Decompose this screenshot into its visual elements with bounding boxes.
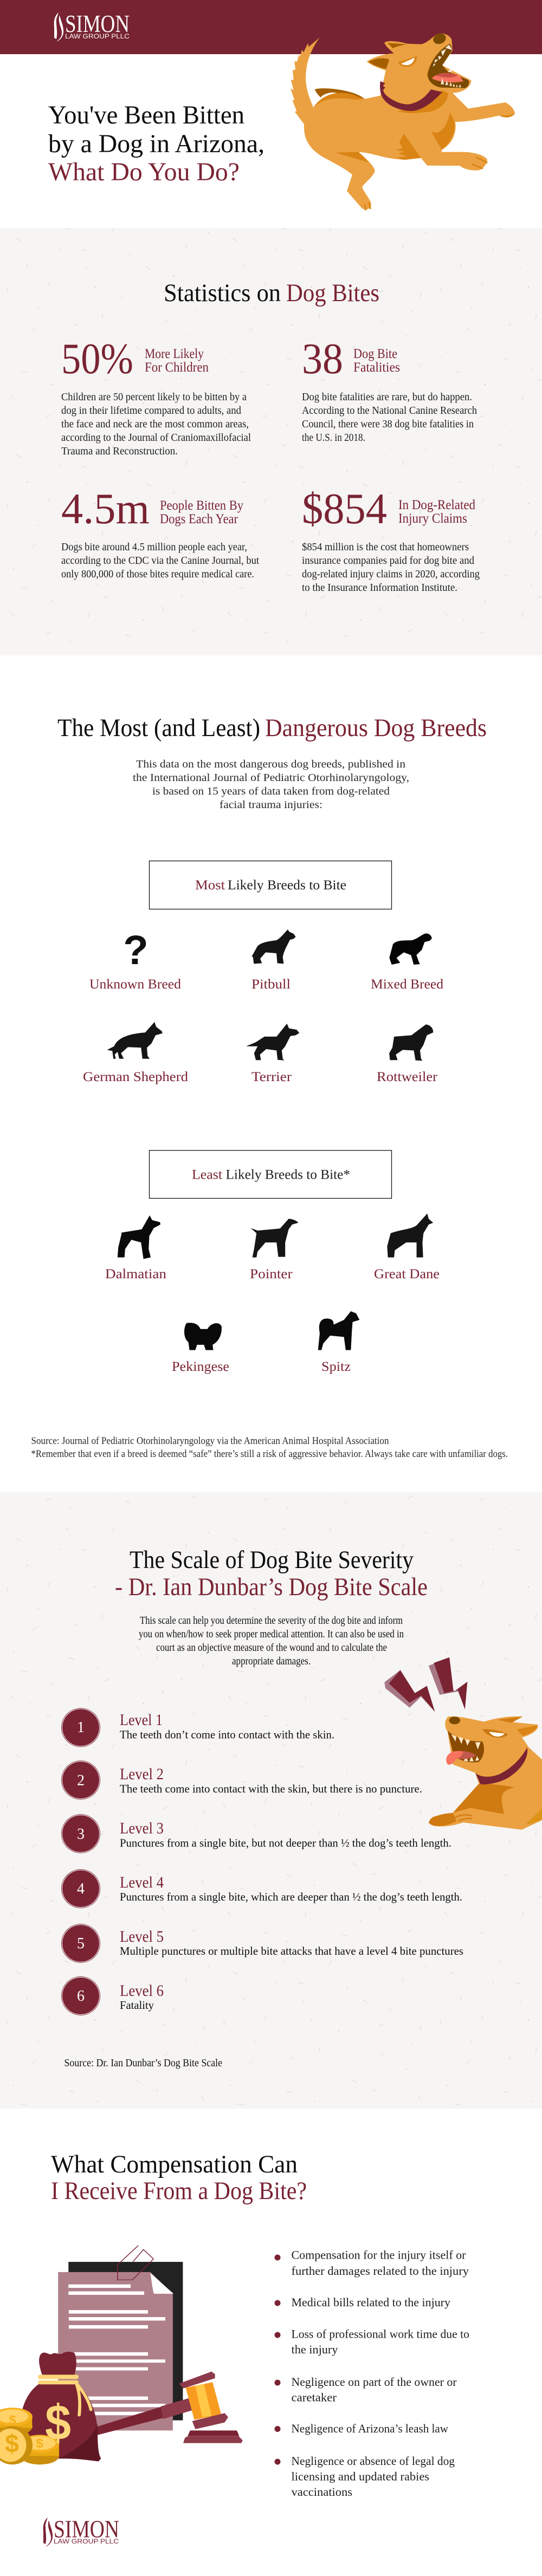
- heading: compensation: What Compensation Can: [51, 2150, 298, 2178]
- bullet item: licensing and vaccinations: [274, 2454, 455, 2499]
- bullet item: negligence of owner: caretaker: [292, 2391, 337, 2404]
- bullet item: compensation for injury: further damages related to the injury: [292, 2264, 469, 2278]
- level 4: 4: [77, 1881, 85, 1897]
- logo: Simon Law Group PLLC: LAW GROUP PLLC: [65, 32, 130, 40]
- intro paragraph: bite scale: appropriate damages.: [232, 1656, 311, 1667]
- level 5: 5: [77, 1935, 85, 1952]
- level 6: Fatality: [120, 1999, 154, 2012]
- stat: 38: [302, 335, 477, 444]
- level 6: [61, 1976, 164, 2015]
- hero title: You've Been Bitten: [48, 101, 244, 129]
- illustration: lightning bolts: [384, 1657, 467, 1712]
- level 5: Multiple punctures or multiple bite attacks that have a level 4 bite punctures: [120, 1944, 463, 1957]
- bullet item: negligence of owner: [274, 2375, 457, 2404]
- stat: 38: Fatalities: [353, 360, 400, 375]
- illustration: documents, money bag, coins and gavel: $: [9, 2413, 16, 2428]
- stat: $854: In Dog-Related: [398, 498, 475, 512]
- breed: pekingese: [172, 1323, 229, 1374]
- stat: 38: Council, there were 38 dog bite fatalities in: [302, 418, 474, 430]
- stat: $854: $854: [302, 485, 387, 533]
- bullet item: licensing and vaccinations: Negligence or absence of legal dog: [292, 2454, 455, 2468]
- intro paragraph: This data on the most dangerous dog breeds, published in: [136, 758, 405, 770]
- level 1: 1: [77, 1719, 85, 1736]
- heading: bite scale: - Dr. Ian Dunbar’s Dog Bite Scale: [115, 1573, 428, 1601]
- source note: breeds: [31, 1435, 508, 1460]
- level 2: The teeth come into contact with the skin, but there is no puncture.: [120, 1782, 422, 1795]
- intro paragraph: bite scale: [139, 1615, 404, 1667]
- heading: compensation: I Receive From a Dog Bite?: [51, 2177, 307, 2205]
- panel: dangerous dog breeds: [31, 714, 508, 1460]
- level 3: Level 3: [120, 1819, 164, 1837]
- bullet item: licensing and vaccinations: licensing and updated rabies: [292, 2470, 429, 2483]
- breed: spitz: [318, 1311, 359, 1374]
- level 4: Level 4: [120, 1874, 164, 1891]
- footer logo: Simon Law Group PLLC: SIMON: [54, 2515, 119, 2542]
- level 1: [61, 1708, 334, 1747]
- illustration: documents, money bag, coins and gavel: [0, 2246, 243, 2464]
- heading: statistics: Statistics on: [164, 279, 281, 307]
- intro paragraph: bite scale: you on when/how to seek proper medical attention. It can also be used in: [139, 1629, 404, 1640]
- heading: bite scale: [115, 1546, 428, 1601]
- breed: unknown: ?: [123, 927, 149, 973]
- breed: dalmatian: Dalmatian: [105, 1267, 167, 1282]
- breed: terrier: Terrier: [251, 1070, 292, 1084]
- stat: 4.5m: according to the CDC via the Canine Journal, but: [61, 555, 259, 567]
- breed: pekingese: Pekingese: [172, 1359, 229, 1374]
- breed: dalmatian: [105, 1215, 167, 1282]
- stat: 50%: More Likely: [145, 347, 204, 361]
- hero title: What Do You Do?: [48, 158, 240, 186]
- heading: breeds: [57, 714, 487, 742]
- list: compensation items: [274, 2248, 469, 2499]
- intro paragraph: bite scale: court as an objective measure of the wound and to calculate the: [156, 1642, 387, 1654]
- level 6: 6: [77, 1988, 85, 2005]
- bullet item: compensation for injury: [274, 2248, 469, 2278]
- stat: 38: Dog Bite: [353, 347, 397, 361]
- illustration: documents, money bag, coins and gavel: $: [36, 2436, 43, 2451]
- illustration: jumping barking dog: [291, 32, 515, 210]
- level 6: Level 6: [120, 1982, 164, 2000]
- stat: 4.5m: [61, 485, 259, 580]
- bullet item: loss of work time: [274, 2327, 469, 2356]
- intro paragraph: facial trauma injuries:: [220, 799, 322, 811]
- box: least likely breeds: Least: [192, 1168, 222, 1182]
- level 3: [61, 1814, 451, 1853]
- level 1: Level 1: [120, 1711, 163, 1729]
- heading: bite scale: The Scale of Dog Bite Severity: [130, 1546, 414, 1574]
- stat: 4.5m: only 800,000 of those bites require medical care.: [61, 568, 254, 580]
- intro paragraph: [133, 758, 409, 811]
- bullet item: licensing and vaccinations: vaccinations: [292, 2485, 352, 2499]
- level 3: Punctures from a single bite, but not deeper than ½ the dog’s teeth length.: [120, 1836, 451, 1849]
- breed: pitbull: Pitbull: [251, 977, 291, 992]
- breed: terrier: [246, 1024, 299, 1084]
- heading: statistics: [164, 279, 379, 307]
- stat: 50%: 50%: [61, 335, 133, 383]
- stat: 38: 38: [302, 335, 343, 383]
- box: most likely breeds: Most: [195, 878, 225, 893]
- stat: 38: the U.S. in 2018.: [302, 432, 365, 444]
- panel: scale of dog bite severity: [0, 1492, 542, 2109]
- stat: $854: Injury Claims: [398, 511, 467, 526]
- header band: [0, 0, 542, 54]
- intro paragraph: is based on 15 years of data taken from dog-related: [152, 785, 390, 797]
- stat: 4.5m: Dogs Each Year: [160, 512, 238, 526]
- footer logo: Simon Law Group PLLC: LAW GROUP PLLC: [54, 2538, 119, 2545]
- stat: $854: [302, 485, 480, 594]
- bullet item: leash law: Negligence of Arizona’s leash law: [292, 2422, 448, 2435]
- level 2: Level 2: [120, 1765, 164, 1783]
- breed: pointer: [250, 1219, 298, 1282]
- illustration: documents, money bag, coins and gavel: $: [5, 2429, 19, 2457]
- level 2: [61, 1760, 422, 1799]
- breed: german shepherd: [83, 1022, 189, 1084]
- hero title: [48, 101, 264, 186]
- stat: $854: $854 million is the cost that homeowners: [302, 541, 469, 553]
- illustration: documents, money bag, coins and gavel: $: [45, 2395, 71, 2450]
- source note: breeds: Source: Journal of Pediatric Otorhinolaryngology via the American Animal Hospital Association: [31, 1435, 389, 1447]
- footer logo: Simon Law Group PLLC: [43, 2515, 119, 2547]
- stat: $854: insurance companies paid for dog bite and: [302, 555, 474, 567]
- stat: 4.5m: People Bitten By: [160, 498, 243, 513]
- level 4: Punctures from a single bite, which are deeper than ½ the dog’s teeth length.: [120, 1890, 462, 1903]
- stat: 50%: For Children: [145, 360, 209, 375]
- bullet item: compensation for injury: Compensation for the injury itself or: [292, 2248, 466, 2262]
- box: most likely breeds: [150, 861, 391, 909]
- stat: $854: to the Insurance Information Institute.: [302, 582, 457, 594]
- breed: unknown: Unknown Breed: [89, 977, 182, 992]
- bullet item: medical bills: Medical bills related to the injury: [292, 2295, 450, 2309]
- breed: spitz: Spitz: [321, 1359, 351, 1374]
- stat: 50%: the face and neck are the most common areas,: [61, 418, 249, 430]
- panel: compensation: [0, 2150, 469, 2547]
- breed: pitbull: [251, 929, 296, 992]
- panel: statistics on dog bites: [0, 228, 542, 655]
- box: least likely breeds: [150, 1150, 391, 1198]
- illustration: growling dog: [429, 1716, 542, 1830]
- level 2: 2: [77, 1772, 85, 1789]
- breed: mixed: Mixed Breed: [371, 977, 444, 992]
- bullet item: loss of work time: Loss of professional work time due to: [292, 2327, 469, 2341]
- bullet item: loss of work time: the injury: [292, 2343, 338, 2356]
- bullet item: negligence of owner: Negligence on part of the owner or: [292, 2375, 457, 2389]
- stat: 50%: Trauma and Reconstruction.: [61, 445, 178, 457]
- heading: statistics: Dog Bites: [286, 279, 379, 307]
- stat: 38: Dog bite fatalities are rare, but do happen.: [302, 391, 472, 403]
- stat: 50%: according to the Journal of Craniomaxillofacial: [61, 432, 251, 444]
- stat: 4.5m: Dogs bite around 4.5 million people each year,: [61, 541, 247, 553]
- breed: unknown: [89, 927, 182, 992]
- breed: pointer: Pointer: [250, 1267, 293, 1282]
- stat: 38: According to the National Canine Research: [302, 405, 477, 417]
- breed: rottweiler: [377, 1024, 438, 1084]
- intro paragraph: the International Journal of Pediatric Otorhinolaryngology,: [133, 772, 409, 784]
- box: most likely breeds: Likely Breeds to Bite: [228, 878, 346, 893]
- breed: mixed: [371, 934, 444, 992]
- stat: 50%: [61, 335, 251, 457]
- level 3: 3: [77, 1826, 85, 1843]
- breed: rottweiler: Rottweiler: [377, 1070, 438, 1084]
- level 4: [61, 1869, 462, 1908]
- level 5: Level 5: [120, 1928, 164, 1946]
- box: least likely breeds: Likely Breeds to Bite*: [225, 1168, 350, 1182]
- stat: 50%: Children are 50 percent likely to be bitten by a: [61, 391, 247, 403]
- stat: 50%: dog in their lifetime compared to adults, and: [61, 405, 241, 417]
- heading: breeds: Dangerous Dog Breeds: [265, 714, 487, 742]
- logo: Simon Law Group PLLC: SIMON: [65, 10, 130, 37]
- stat: $854: dog-related injury claims in 2020, according: [302, 568, 480, 580]
- level 1: The teeth don’t come into contact with the skin.: [120, 1728, 334, 1741]
- heading: breeds: The Most (and Least): [57, 714, 260, 742]
- hero title: by a Dog in Arizona,: [48, 129, 264, 158]
- logo: Simon Law Group PLLC: [54, 10, 130, 42]
- breed: great dane: [374, 1214, 440, 1282]
- breed: great dane: Great Dane: [374, 1267, 440, 1282]
- level 5: [61, 1924, 463, 1963]
- intro paragraph: bite scale: This scale can help you determine the severity of the dog bite and inform: [140, 1615, 403, 1627]
- breed: german shepherd: German Shepherd: [83, 1070, 189, 1084]
- heading: compensation: [51, 2150, 307, 2205]
- source note: bite scale: Source: Dr. Ian Dunbar’s Dog Bite Scale: [64, 2058, 222, 2069]
- stat: 4.5m: 4.5m: [61, 485, 150, 533]
